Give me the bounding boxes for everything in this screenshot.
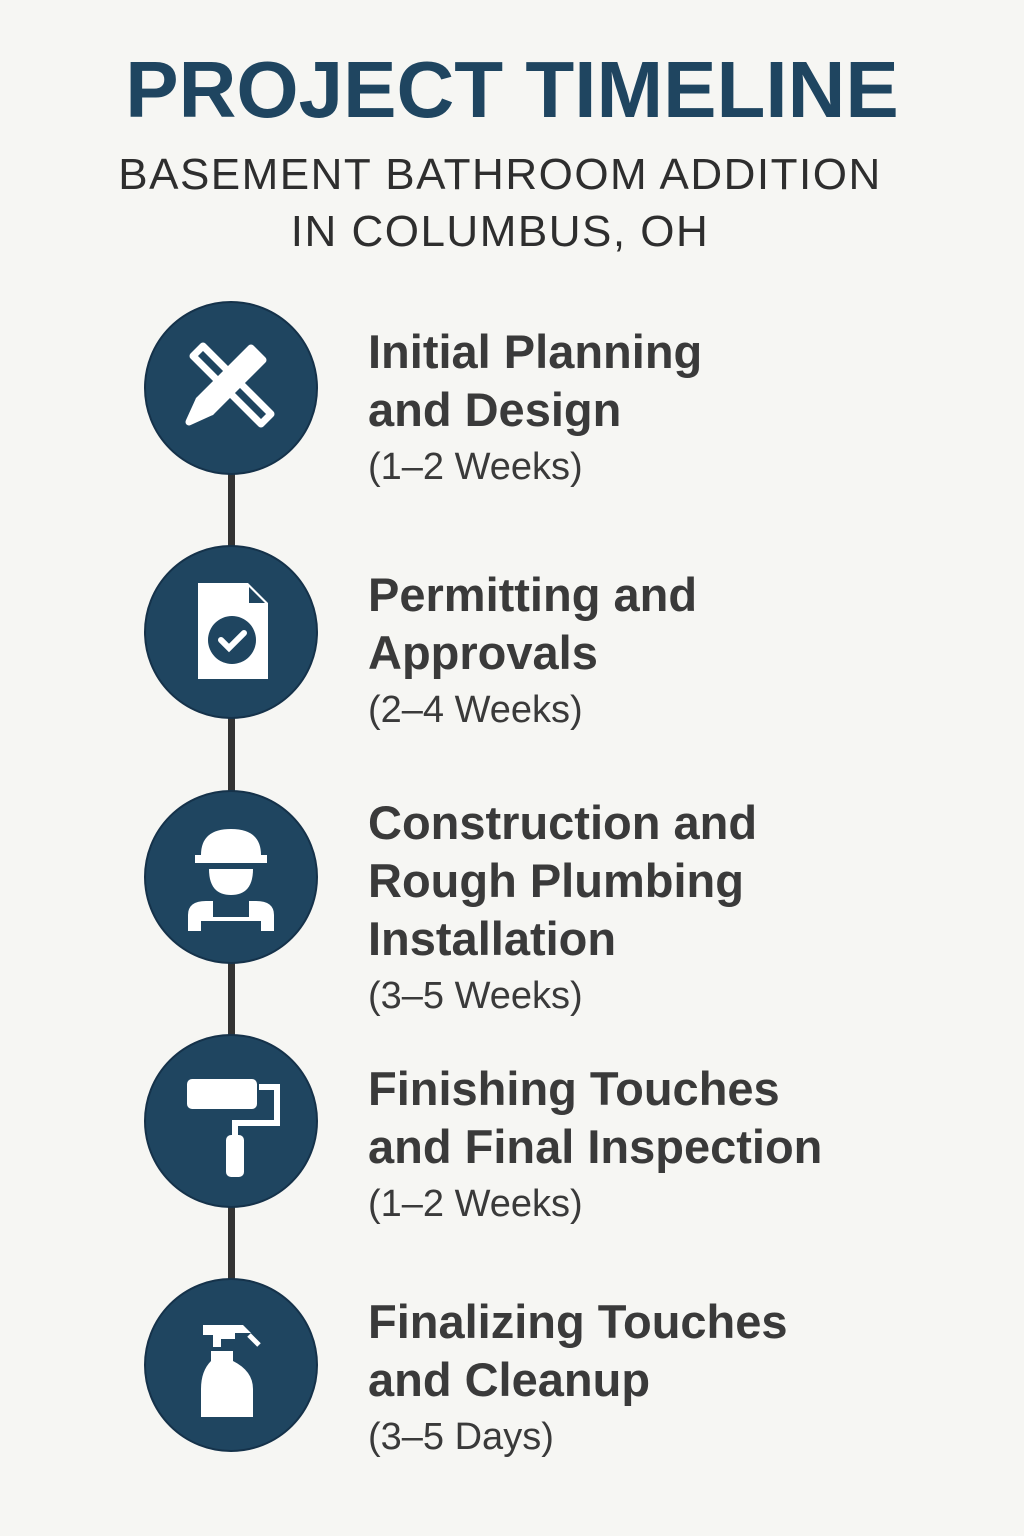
step 2 text: (2–4 Weeks)	[368, 689, 583, 731]
title: PROJECT TIMELINE	[125, 45, 899, 134]
step 4 text	[368, 1062, 822, 1225]
step 1 text: and Design	[368, 383, 621, 436]
step 3 text: Construction and	[368, 796, 757, 849]
step 4 text: and Final Inspection	[368, 1120, 822, 1173]
step 5 text	[368, 1295, 788, 1458]
step 2 text: Approvals	[368, 626, 598, 679]
icon: worker	[144, 790, 318, 964]
icon: spray bottle	[144, 1278, 318, 1452]
step 5 text: Finalizing Touches	[368, 1295, 788, 1348]
step 5 text: and Cleanup	[368, 1353, 650, 1406]
icon: document check	[144, 545, 318, 719]
step 1 text: (1–2 Weeks)	[368, 446, 583, 488]
step 2 text	[368, 568, 697, 731]
step 5 text: (3–5 Days)	[368, 1416, 554, 1458]
step 3 text: Rough Plumbing	[368, 854, 744, 907]
step 1 text: Initial Planning	[368, 325, 702, 378]
subtitle: IN COLUMBUS, OH	[291, 207, 709, 256]
timeline connector line	[228, 388, 235, 1365]
icon: pencil and ruler	[144, 301, 318, 475]
step 3 text: Installation	[368, 912, 616, 965]
subtitle	[118, 150, 882, 256]
step 4 text: Finishing Touches	[368, 1062, 780, 1115]
icon: paint roller	[144, 1034, 318, 1208]
step 3 text: (3–5 Weeks)	[368, 975, 583, 1017]
subtitle: BASEMENT BATHROOM ADDITION	[118, 150, 882, 199]
step 2 text: Permitting and	[368, 568, 697, 621]
step 4 text: (1–2 Weeks)	[368, 1183, 583, 1225]
step 3 text	[368, 796, 757, 1017]
step 1 text	[368, 325, 702, 488]
